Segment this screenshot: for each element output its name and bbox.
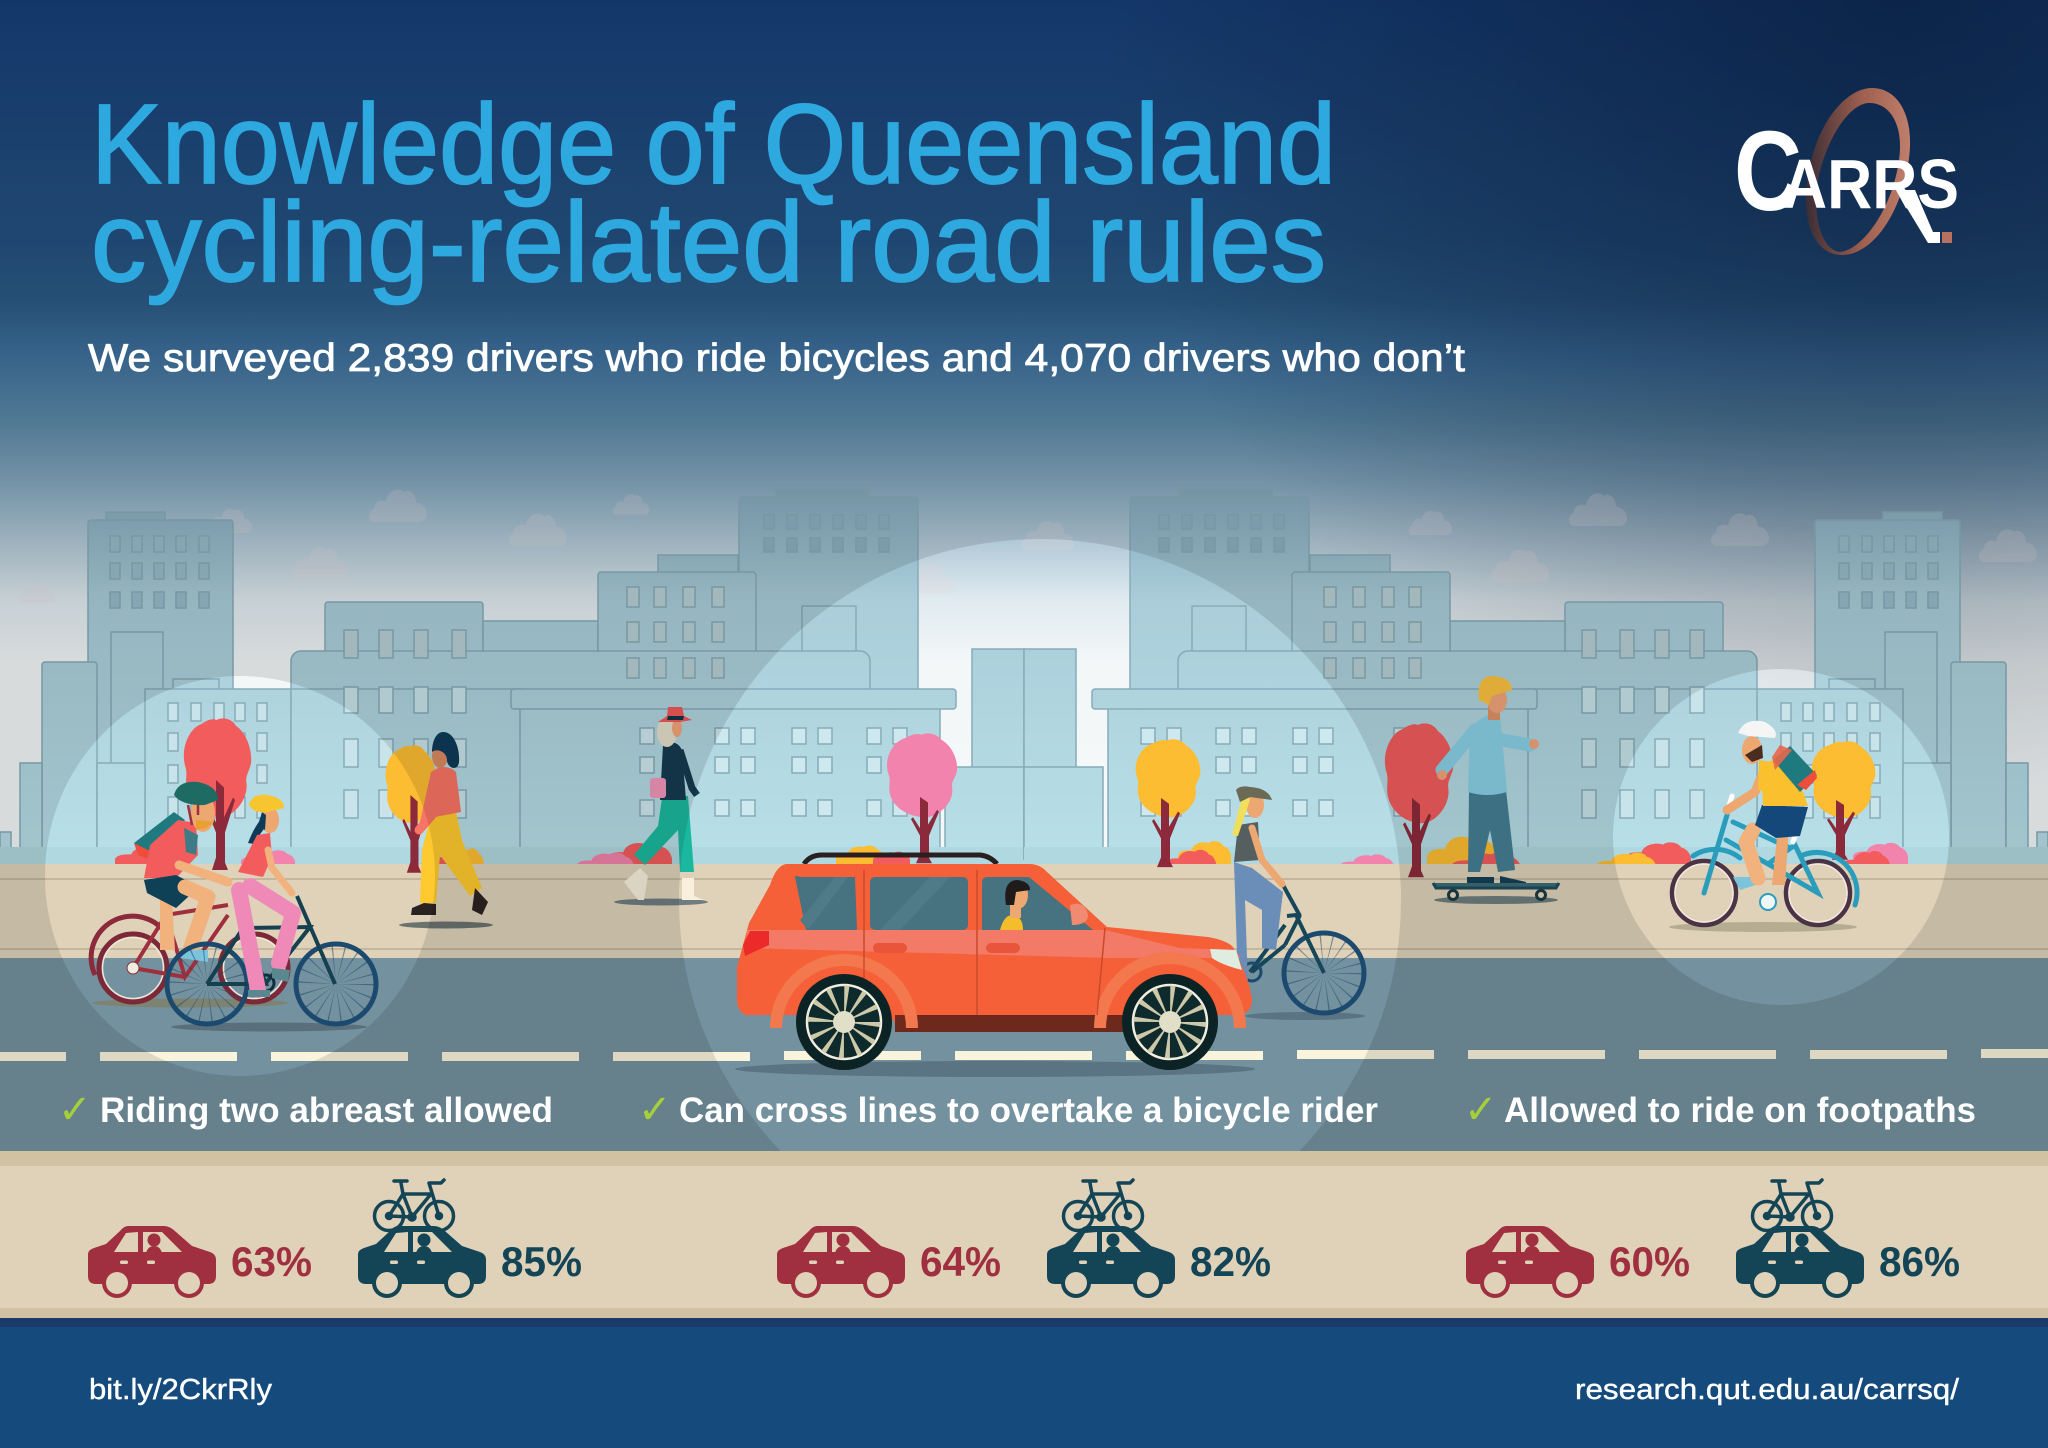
mirror xyxy=(1070,904,1088,925)
title: cycling-related road rules xyxy=(91,179,1326,305)
sky background xyxy=(0,0,2048,870)
icon: car non-riders xyxy=(777,1226,905,1298)
trees xyxy=(184,718,1875,877)
stat pair: footpaths xyxy=(1466,1180,1960,1298)
road xyxy=(0,958,2048,1151)
bike xyxy=(1243,885,1364,1013)
tail light xyxy=(743,931,769,956)
caption: footpaths: ✓ xyxy=(1464,1087,1498,1133)
red car xyxy=(735,855,1255,1077)
skateboarder xyxy=(1433,676,1559,904)
tree: red left xyxy=(184,718,251,870)
caption: footpaths: Allowed to ride on footpaths xyxy=(1504,1091,1976,1130)
logo letters xyxy=(1734,108,1959,243)
cyclist on blue bike, right xyxy=(1669,721,1857,932)
body xyxy=(737,864,1252,1032)
clouds xyxy=(19,489,2037,603)
title: Knowledge of Queensland xyxy=(91,81,1336,207)
cyclist behind the car xyxy=(1232,786,1365,1020)
logo ring xyxy=(1806,88,1910,255)
logo square xyxy=(1942,232,1952,243)
dark bike xyxy=(167,896,376,1024)
captions xyxy=(58,1087,1976,1133)
red bike xyxy=(91,905,288,1002)
rider with yellow helmet xyxy=(238,795,293,997)
stat: 63%: 63% xyxy=(231,1238,312,1285)
rider xyxy=(1234,862,1283,985)
tree: yellow right xyxy=(1812,741,1875,860)
tree: red right xyxy=(1385,723,1453,877)
wheel arches xyxy=(776,958,1240,1028)
roof rack xyxy=(804,855,997,864)
stat: 60%: 60% xyxy=(1609,1238,1690,1285)
footer link right: research.qut.edu.au/carrsq/ xyxy=(1575,1374,1960,1406)
caption: riding two abreast: ✓ xyxy=(58,1087,92,1133)
headlight xyxy=(1210,949,1242,970)
bike wheels xyxy=(1672,861,1850,925)
stat pair: riding two abreast xyxy=(88,1180,582,1298)
caption: cross lines: Can cross lines to overtake a bicycle rider xyxy=(679,1091,1378,1130)
footpath xyxy=(0,864,2048,958)
city skyline: left half xyxy=(0,488,1024,865)
caption: cross lines: ✓ xyxy=(638,1087,672,1133)
bushes xyxy=(115,835,1908,873)
CARRS logo xyxy=(1734,88,1959,255)
stat: 86%: 86% xyxy=(1879,1238,1960,1285)
stat: 85%: 85% xyxy=(501,1238,582,1285)
pedestrian with yellow trousers xyxy=(399,732,493,928)
statistics band xyxy=(0,1151,2048,1318)
stat: 64%: 64% xyxy=(920,1238,1001,1285)
footer xyxy=(0,1318,2048,1448)
tree: pink centre xyxy=(887,733,957,863)
stat pair: cross lines xyxy=(777,1180,1271,1298)
logo letters: C xyxy=(1734,108,1802,234)
windows xyxy=(795,876,857,930)
bike frame xyxy=(1693,796,1857,905)
rider with green helmet xyxy=(134,782,228,962)
caption: riding two abreast: Riding two abreast allowed xyxy=(100,1091,553,1130)
pedestrian with hat xyxy=(614,707,708,906)
wheels xyxy=(796,974,892,1070)
cyclists riding two abreast xyxy=(91,782,376,1032)
icon: car with bike xyxy=(1047,1180,1175,1298)
icon: car non-riders xyxy=(88,1226,216,1298)
icon: car with bike xyxy=(358,1180,486,1298)
door handles xyxy=(873,943,907,953)
icon: car with bike xyxy=(1736,1180,1864,1298)
logo letters: ARRS xyxy=(1782,145,1959,223)
driver xyxy=(1000,880,1030,930)
icon: car non-riders xyxy=(1466,1226,1594,1298)
sill xyxy=(895,1015,1127,1032)
tree: yellow centre xyxy=(1136,739,1200,867)
title xyxy=(91,81,1336,305)
door lines xyxy=(864,870,1105,1015)
belt line xyxy=(745,930,1240,958)
footer link left: bit.ly/2CkrRly xyxy=(89,1374,273,1406)
stat: 82%: 82% xyxy=(1190,1238,1271,1285)
subtitle: We surveyed 2,839 drivers who ride bicycles and 4,070 drivers who don’t xyxy=(88,337,1465,380)
tree: yellow left xyxy=(386,745,436,873)
rider xyxy=(1772,815,1790,885)
city skyline: mirrored right half xyxy=(1024,488,2048,865)
